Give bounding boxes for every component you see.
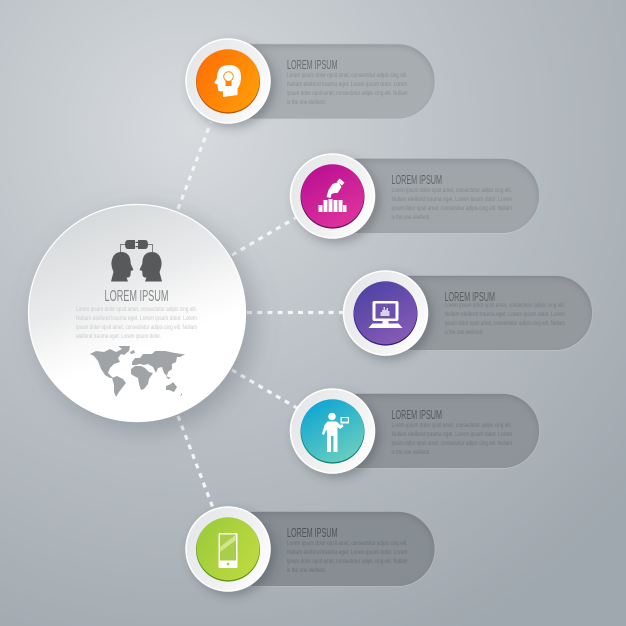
- title 1: LOREM IPSUM: [287, 57, 338, 72]
- purple disc: [354, 282, 418, 346]
- teal disc: [300, 400, 364, 464]
- ring 3: [344, 271, 428, 355]
- main body text: ipsum dolor opsit amet, consectetur adipis cing elit. Nullam: [76, 324, 197, 331]
- body 4: ipsum dolor opsit amet, consectetur adipis cing elit. Nullam: [392, 440, 512, 447]
- icon: two heads connected by a plug: [111, 240, 162, 282]
- pill 4: [322, 394, 540, 468]
- orange disc: [196, 50, 260, 114]
- body 1: [287, 72, 408, 106]
- body 3: ipsum dolor opsit amet, consectetur adipis cing elit. Nullam: [444, 320, 565, 327]
- icon: hand placing on bar chart: [318, 178, 346, 212]
- main body text: [76, 306, 197, 340]
- ring 1: [186, 39, 270, 123]
- body 1: Nullam eleifend trauma eget. Lorem ipsum dolor. Lorem: [287, 81, 408, 88]
- body 5: [287, 540, 408, 574]
- body 1: ipsum dolor opsit amet, consectetur adipis cing elit. Nullam: [287, 90, 408, 97]
- green disc: [196, 518, 260, 582]
- pill 1: [218, 44, 435, 119]
- body 4: Nullam eleifend trauma eget. Lorem ipsum dolor. Lorem: [392, 431, 512, 438]
- body 1: is the one eleifend.: [287, 99, 326, 106]
- title 4: LOREM IPSUM: [392, 407, 442, 422]
- pill 5: [218, 512, 435, 586]
- title 5: LOREM IPSUM: [287, 525, 338, 540]
- ring 5: [186, 507, 270, 591]
- body 4: [392, 422, 512, 456]
- pill 3: [376, 276, 592, 350]
- icon: head with light bulb: [214, 65, 241, 97]
- icon: computer: [368, 301, 402, 328]
- body 2: Nullam eleifend trauma eget. Lorem ipsum dolor. Lorem: [392, 196, 512, 203]
- panel: item 4 teal: [290, 389, 540, 473]
- title 2: LOREM IPSUM: [392, 172, 442, 187]
- panel: main circle: [28, 204, 246, 422]
- body 5: is the one eleifend.: [287, 567, 326, 574]
- panel: item 3 purple: [344, 271, 592, 355]
- magenta disc: [300, 165, 364, 229]
- main body text: Lorem ipsum dolor opsit amet, consectetur adipis cing elit.: [76, 306, 197, 313]
- ring 2: [290, 154, 374, 238]
- panel: item 2 magenta: [290, 154, 540, 238]
- pill 2: [322, 158, 540, 234]
- body 5: Lorem ipsum dolor opsit amet, consectetur adipis cing elit.: [287, 540, 408, 547]
- main heading: LOREM IPSUM: [104, 288, 168, 305]
- body 1: Lorem ipsum dolor opsit amet, consectetur adipis cing elit.: [287, 72, 408, 79]
- panel: item 1 orange: [186, 39, 435, 123]
- body 4: is the one eleifend.: [392, 449, 431, 456]
- body 2: Lorem ipsum dolor opsit amet, consectetur adipis cing elit.: [392, 187, 512, 194]
- icon: world map: [90, 346, 185, 397]
- title 3: LOREM IPSUM: [444, 289, 495, 304]
- dashed connector lines: [178, 122, 344, 508]
- body 2: ipsum dolor opsit amet, consectetur adipis cing elit. Nullam: [392, 205, 512, 212]
- body 3: is the one eleifend.: [444, 329, 484, 336]
- main body text: Nullam eleifend trauma eget. Lorem ipsum dolor. Lorem: [76, 315, 197, 322]
- body 4: Lorem ipsum dolor opsit amet, consectetur adipis cing elit.: [392, 422, 512, 429]
- icon: person holding tablet: [322, 413, 349, 452]
- body 5: ipsum dolor opsit amet, consectetur adipis cing elit. Nullam: [287, 558, 408, 565]
- body 2: [392, 187, 512, 221]
- body 5: Nullam eleifend trauma eget. Lorem ipsum dolor. Lorem: [287, 549, 408, 556]
- body 2: is the one eleifend.: [392, 214, 431, 221]
- body 3: [444, 302, 565, 336]
- body 3: Nullam eleifend trauma eget. Lorem ipsum dolor. Lorem: [444, 311, 565, 318]
- main body text: eleifend trauma eget. Lorem ipsum dolor.: [76, 333, 161, 340]
- panel: item 5 green: [186, 507, 435, 591]
- ring 4: [290, 389, 374, 473]
- body 3: Lorem ipsum dolor opsit amet, consectetur adipis cing elit.: [444, 302, 565, 309]
- icon: smartphone: [218, 533, 238, 568]
